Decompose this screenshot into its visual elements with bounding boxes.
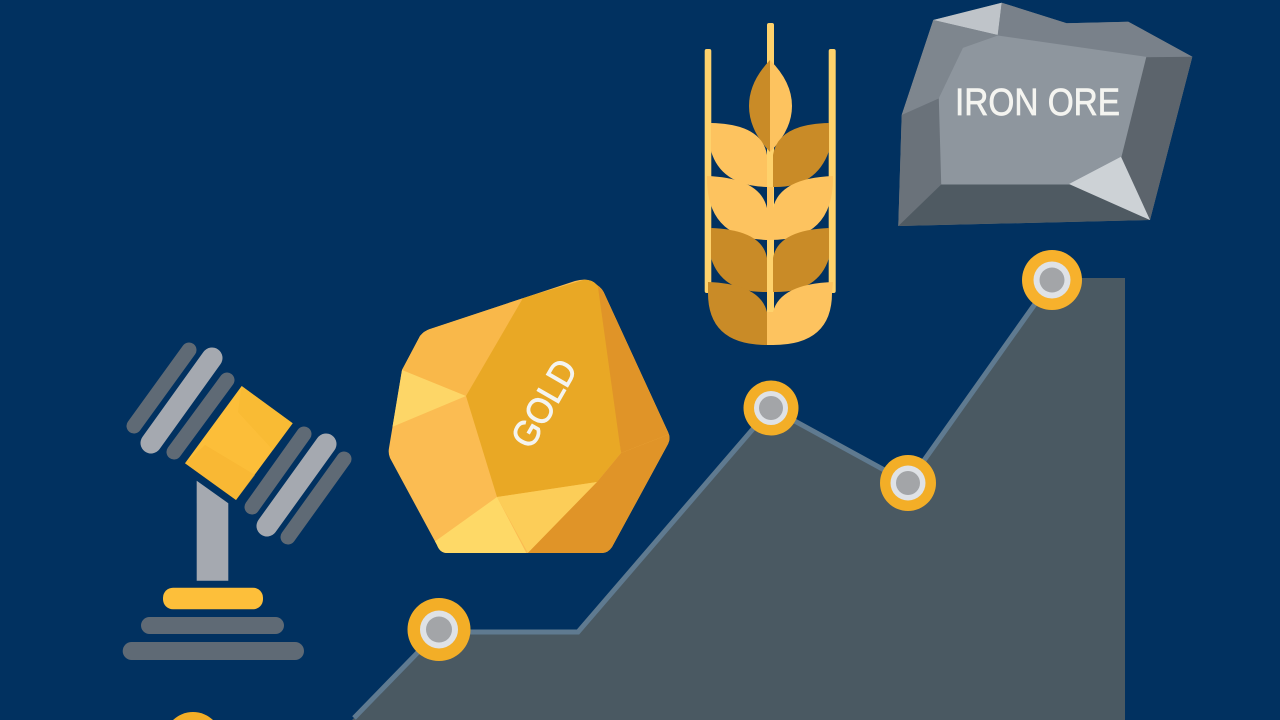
- wheat row 3: [711, 228, 829, 292]
- gold facets: [388, 280, 670, 553]
- marker: point 2: [744, 380, 798, 436]
- wheat row 1: [711, 123, 829, 187]
- area chart: [173, 250, 1125, 720]
- wheat row 2: [707, 176, 833, 240]
- marker: bottom left: [173, 712, 213, 720]
- marker: point 4: [1022, 250, 1082, 310]
- gavel handle: [197, 481, 228, 581]
- chart area fill: [352, 278, 1125, 720]
- wheat stems: [705, 23, 836, 345]
- icon: wheat: [705, 23, 836, 345]
- gold label: GOLD: [502, 352, 585, 455]
- icon: iron ore rock: [898, 3, 1192, 226]
- gavel left bars: [134, 350, 227, 452]
- wheat top grain: [749, 60, 792, 152]
- gavel head: [185, 386, 293, 500]
- chart line: [354, 280, 1052, 718]
- iron ore label: IRON ORE: [955, 82, 1120, 124]
- marker: point 3: [880, 455, 936, 511]
- gavel base: [123, 588, 304, 660]
- marker: point 1: [408, 598, 470, 661]
- icon: gavel: [123, 350, 344, 660]
- gavel right bars: [252, 434, 344, 537]
- wheat row 4: [708, 282, 833, 345]
- icon: gold nugget: [388, 280, 670, 553]
- rock facets: [898, 3, 1192, 226]
